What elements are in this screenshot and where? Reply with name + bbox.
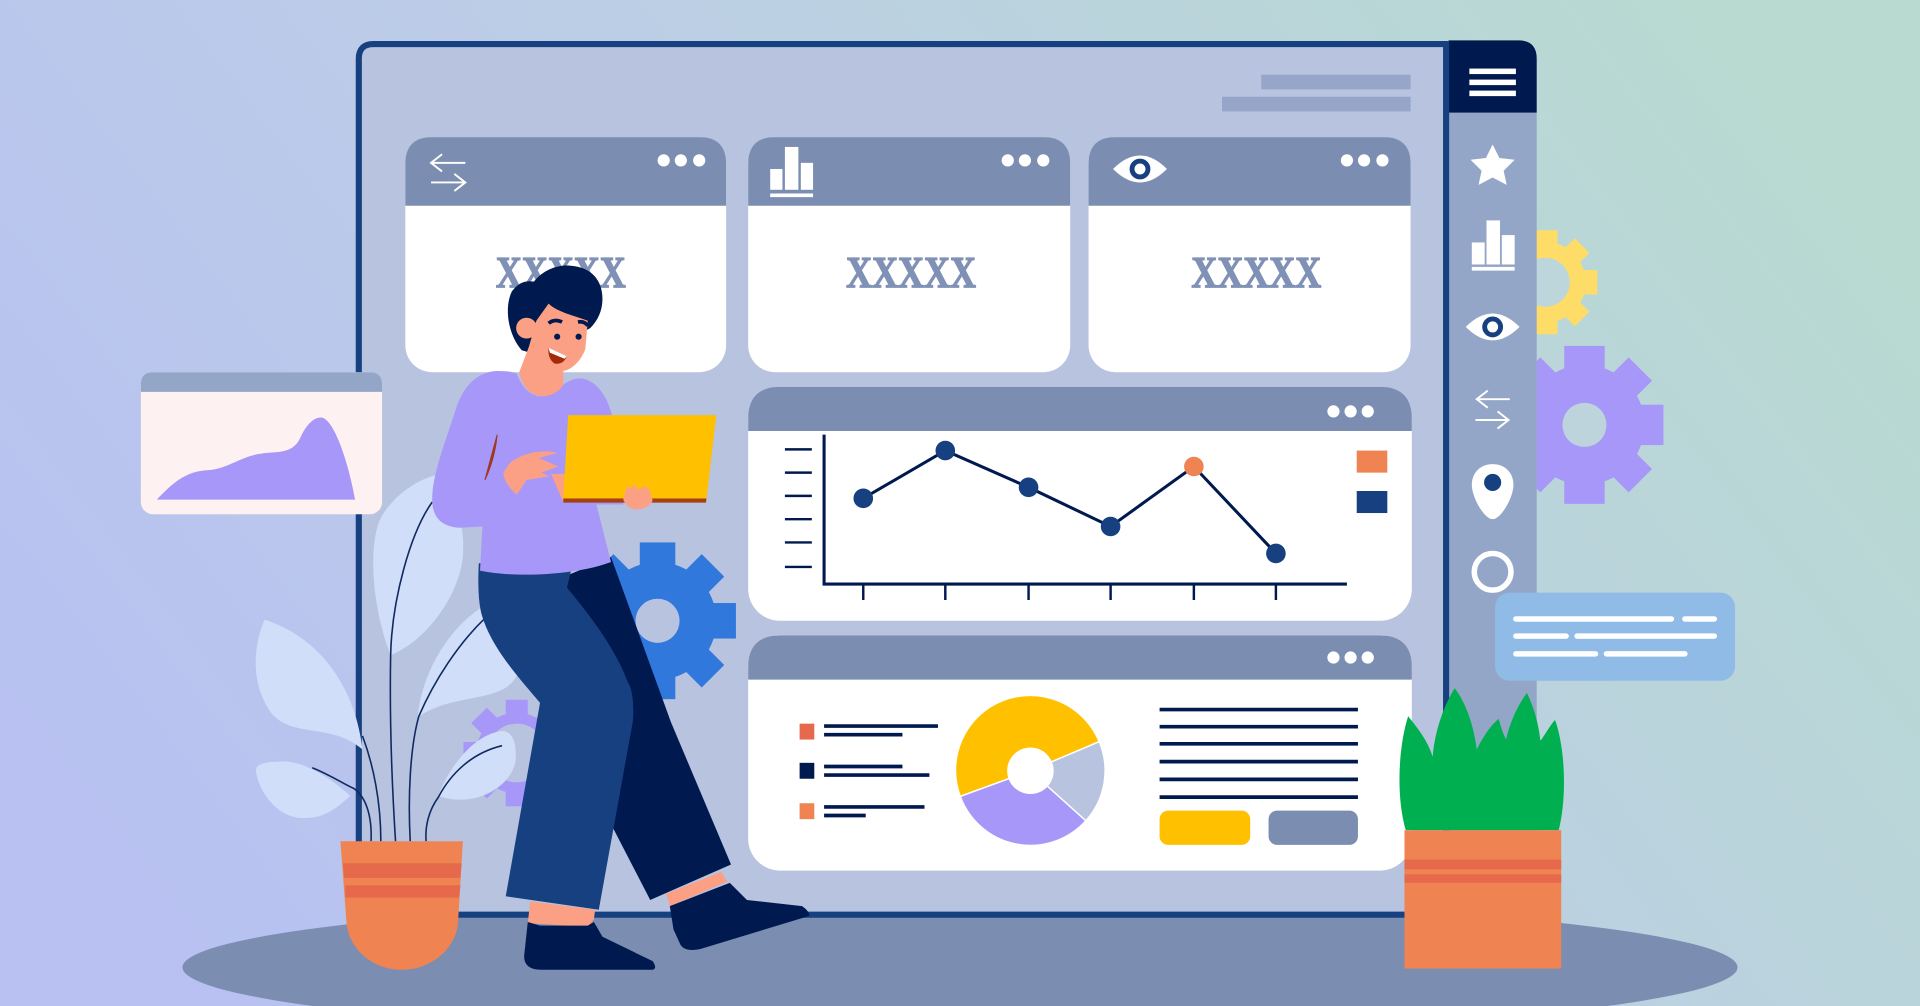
gear: blue [579,542,736,699]
sidebar [1449,40,1537,845]
gear: purple right [1505,346,1663,504]
pot [340,841,463,970]
data line [853,441,1286,563]
icon: eye [1466,313,1520,340]
axes [785,435,1347,600]
floating area chart card [141,372,382,514]
menu dots [1327,405,1374,418]
icon: eye [1113,156,1167,182]
card value: XXXXX [1191,248,1321,297]
icon: bar chart [1472,220,1515,271]
right hand [623,485,653,509]
eyes and brows [549,320,588,340]
legend [1357,451,1387,513]
icon: star [1471,144,1515,185]
face and neck [519,304,588,396]
icon: arrows [1475,391,1510,429]
dashboard window [359,44,1446,915]
leaves [1399,688,1564,830]
menu header [1449,40,1537,113]
card 3 [1089,137,1411,372]
person [432,266,809,970]
header placeholder lines [1222,75,1411,111]
back shoe [670,883,809,950]
card value: XXXXX [846,248,976,297]
gear: small purple [463,700,570,806]
card 1 [405,137,726,372]
hair [508,266,602,355]
legend [800,724,938,819]
card value: XXXXX [496,248,626,297]
menu dots [1002,154,1049,167]
front shoe [524,922,655,970]
donut [955,695,1105,845]
left plant [256,475,517,970]
mouth [548,348,567,364]
laptop [551,415,716,503]
menu dots [1341,154,1389,167]
panel: line chart [748,387,1412,621]
back leg [567,557,731,900]
back ankle [666,872,727,906]
text lines [1160,710,1358,797]
sleeve crease [485,435,497,480]
gear: yellow [1493,230,1597,334]
panel: donut chart [748,635,1412,871]
right plant [1399,688,1564,969]
icon: arrows [431,154,465,191]
icon: ring [1474,553,1511,590]
buttons [1160,811,1358,845]
menu dots [1327,651,1374,664]
pot [1404,830,1561,969]
card 2 [748,137,1070,372]
front ankle [528,901,595,927]
left hand [503,451,558,495]
menu dots [658,154,705,167]
area chart [157,418,355,500]
stems [312,502,502,841]
front leg [478,557,633,910]
ear [516,318,537,339]
floor ellipse [182,898,1738,1006]
icon: location pin [1472,464,1513,519]
leaves [256,475,517,818]
icon: bar chart [770,147,813,197]
sweater [432,371,623,575]
chat bubble [1495,593,1735,681]
